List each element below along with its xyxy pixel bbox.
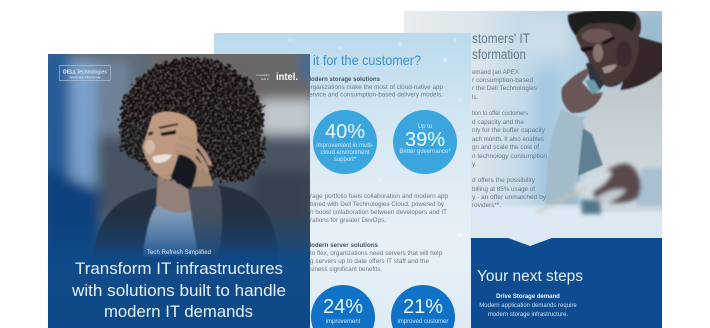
back page body copy: nly for the buffer capacity [472,128,545,134]
stat circle: up to 39%: Better governance* [399,149,451,155]
phone and hand [171,138,213,189]
text: modern server solutions: g servers up to date offers IT staff and the [310,259,430,265]
next steps band [404,238,662,328]
title: modern IT demands [104,302,253,321]
hair [120,58,264,182]
stat circle: 21% [391,285,455,328]
text: storage portfolio paragraph: rage portfolio fuels collaboration and modern app [310,194,449,200]
table [490,204,662,246]
back page body copy: ls. [472,95,478,101]
face [576,19,639,87]
panel: back page, customers' IT transformation [404,10,665,328]
text: storage portfolio paragraph [310,194,449,224]
logo: intel: Innovation [257,73,270,77]
back page body copy: r the Dell Technologies [472,86,537,92]
next steps copy: Modern application demands require [479,303,577,309]
text: modern server solutions [306,243,443,273]
next steps copy: modern storage infrastructure. [488,312,569,318]
ear [634,13,642,38]
text: modern server solutions: Modern server solutions [306,243,379,249]
stat circle: 21%: improved customer [397,319,449,325]
photo: woman on the phone [40,50,316,328]
back page body copy: tion to offer customers [472,111,528,117]
next steps copy: Drive Storage demand [496,294,560,300]
back page body copy: gn and scale the cost of [472,145,539,151]
blurred room background [48,54,310,258]
shadow under arm [578,128,603,176]
back page body copy: billing at 85% usage of [472,187,535,193]
back page body copy: d offers the possibility [472,178,535,184]
back page heading [472,31,530,62]
text: modern server solutions: siness significant benefits. [310,267,382,273]
back page body copy: y. [472,162,477,168]
back page body copy: d capacity and the [472,120,525,126]
back page heading: sformation [472,47,526,62]
text: storage portfolio paragraph: n boost collaboration between developers and IT [310,210,447,216]
logo: Dell Technologies partner program: PARTNER PROGRAM [70,76,101,80]
panel: middle page, what's in it for the customer [214,33,471,328]
stat circle: up to 39%: 39% [405,129,445,151]
text: storage portfolio paragraph: bined with Dell Technologies Cloud, powered by [310,202,444,208]
heading: what's in it for the customer: it for the customer? [313,52,421,68]
stat circle: up to 39%: Up to [418,124,433,130]
logo: intel: built in [261,77,269,81]
stat circle: 40%: support* [334,157,357,163]
sleeve [545,108,587,204]
back page body copy: ach month. It also enables [472,137,544,143]
blurred forearm and hand [574,164,664,214]
hand [561,68,603,113]
hair [568,10,637,36]
back page body copy: y - an offer unmatched by [472,195,546,201]
back page body copy: n technology consumption [472,154,547,160]
stat circle: 40% [313,110,377,174]
text: modern storage solutions: Modern storage solutions [306,77,381,83]
title: Transform IT infrastructures [75,259,283,278]
next steps heading: Your next steps [477,268,583,285]
sweater [583,70,664,212]
text: modern storage solutions: service and consumption-based delivery models. [306,92,443,98]
text: storage portfolio paragraph: rations for greater DevOps. [310,218,386,224]
logo: intel [257,71,298,83]
logo: Dell Technologies partner program [60,66,110,80]
next steps copy [479,294,577,318]
title [71,259,286,321]
navy fade [48,155,310,328]
stat circle: up to 39% [393,110,457,174]
title: with solutions built to handle [71,281,286,300]
cardigan and top [94,176,276,256]
stat circle: 40%: cloud environment [320,150,370,156]
back page body copy: r consumption-based [472,78,533,84]
stat circle: 21%: 21% [403,296,443,318]
stat circle: 24%: 24% [323,296,363,318]
text: modern server solutions: to flex, organizations need servers that will help [310,251,443,257]
back page body copy: roviders**. [472,203,501,209]
face [142,111,197,180]
stat circle: 24%: improvement [326,319,361,325]
panel: front cover [40,50,316,328]
back page body copy: emand (an APEX [472,70,519,76]
kicker: tech refresh simplified: Tech Refresh Simplified [147,249,211,256]
pen [537,187,587,212]
stat circle: 24% [311,285,375,328]
stat circle: 40%: 40% [325,121,365,143]
stat circle: 40%: improvement in multi- [316,143,374,149]
back page heading: stomers' IT [472,31,530,46]
photo: man on the phone [404,10,665,248]
logo: Dell Technologies partner program: DELLTechnologies [63,70,107,76]
text: modern storage solutions: organizations make the most of cloud-native app [307,85,444,91]
phone [586,62,604,91]
neck [620,36,664,92]
text: modern storage solutions [306,77,444,98]
logo: intel: intel. [276,71,298,83]
back page body copy [472,70,547,209]
